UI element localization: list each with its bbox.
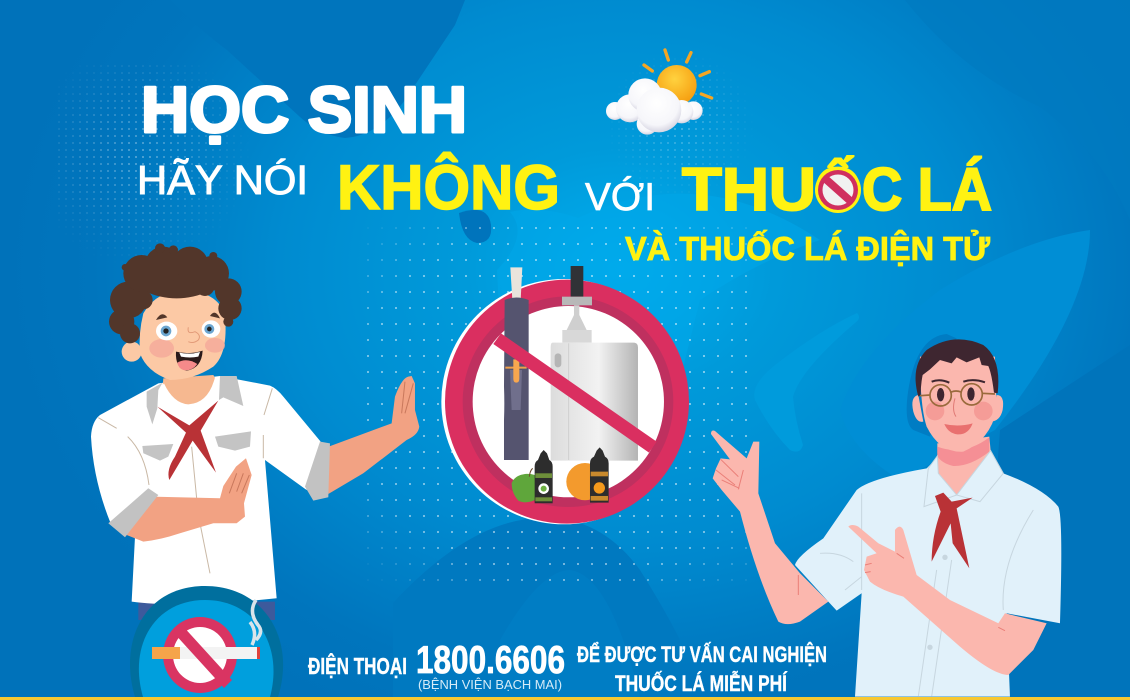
strike bar (493, 333, 657, 453)
right sleeve cuff (305, 442, 330, 501)
sign background (441, 279, 687, 524)
raised arm and hand (711, 431, 828, 624)
neckerchief (932, 493, 973, 568)
face (920, 380, 995, 434)
hotline text (308, 639, 827, 696)
ear (122, 342, 142, 362)
title (137, 73, 992, 267)
hospital name: (BỆNH VIỆN BẠCH MAI) (418, 677, 562, 692)
orange and liquid bottle (566, 447, 609, 503)
green apple and liquid bottle (512, 450, 553, 503)
head (140, 290, 226, 380)
heading: THUỐC LÁ: Ố (815, 156, 861, 223)
label: phone: ĐIỆN THOẠI (308, 652, 407, 679)
pockets (142, 431, 251, 461)
icon: no sign in title (815, 167, 861, 213)
shirt (91, 376, 321, 604)
heading: với: với (585, 159, 655, 222)
subheading: VÀ THUỐC LÁ ĐIỆN TỬ (625, 229, 991, 267)
bottom yellow strip (0, 697, 1130, 700)
ears (912, 395, 1003, 422)
advice line 1: ĐỂ ĐƯỢC TƯ VẤN CAI NGHIỆN (577, 642, 827, 667)
left sleeve cuff (108, 488, 158, 537)
character: boy with glasses (711, 334, 1061, 697)
collar (924, 451, 1003, 507)
hair (109, 243, 242, 343)
central banned e-cigarette sign (441, 266, 689, 524)
shirt buttons (942, 555, 948, 560)
heading: HỌC SINH: HỌC SINH (141, 73, 467, 146)
shadow behind head (907, 334, 957, 437)
icon: no smoking badge (130, 586, 283, 697)
trousers (138, 573, 275, 620)
no sign (163, 617, 237, 693)
neck (937, 437, 1002, 495)
heading: THUỐC LÁ (682, 156, 992, 223)
icon: sun and cloud (606, 50, 712, 135)
pointing forearm and hand (848, 525, 1047, 675)
heading: HÃY NÓI: HÃY NÓI (137, 157, 308, 203)
cigarette (152, 647, 180, 659)
collar (147, 376, 243, 424)
phone number: 1800.6606 (416, 639, 565, 682)
head (920, 357, 997, 452)
face (149, 313, 225, 371)
hair (916, 339, 998, 397)
vape mod (551, 266, 638, 461)
neckerchief (157, 401, 218, 480)
smoke (250, 600, 261, 645)
shirt (795, 450, 1061, 697)
heading: THUỐC LÁ: C LÁ (862, 156, 992, 223)
heading: KHÔNG: KHÔNG (337, 152, 560, 223)
heated tobacco pen (504, 267, 529, 460)
heading: THUỐC LÁ: THU (682, 156, 816, 223)
neck (163, 375, 218, 405)
left forearm and hand (127, 458, 252, 542)
advice line 2: THUỐC LÁ MIỄN PHÍ (615, 670, 788, 696)
right arm (327, 376, 419, 494)
tee (158, 377, 220, 427)
character: boy with curly hair (91, 243, 419, 620)
